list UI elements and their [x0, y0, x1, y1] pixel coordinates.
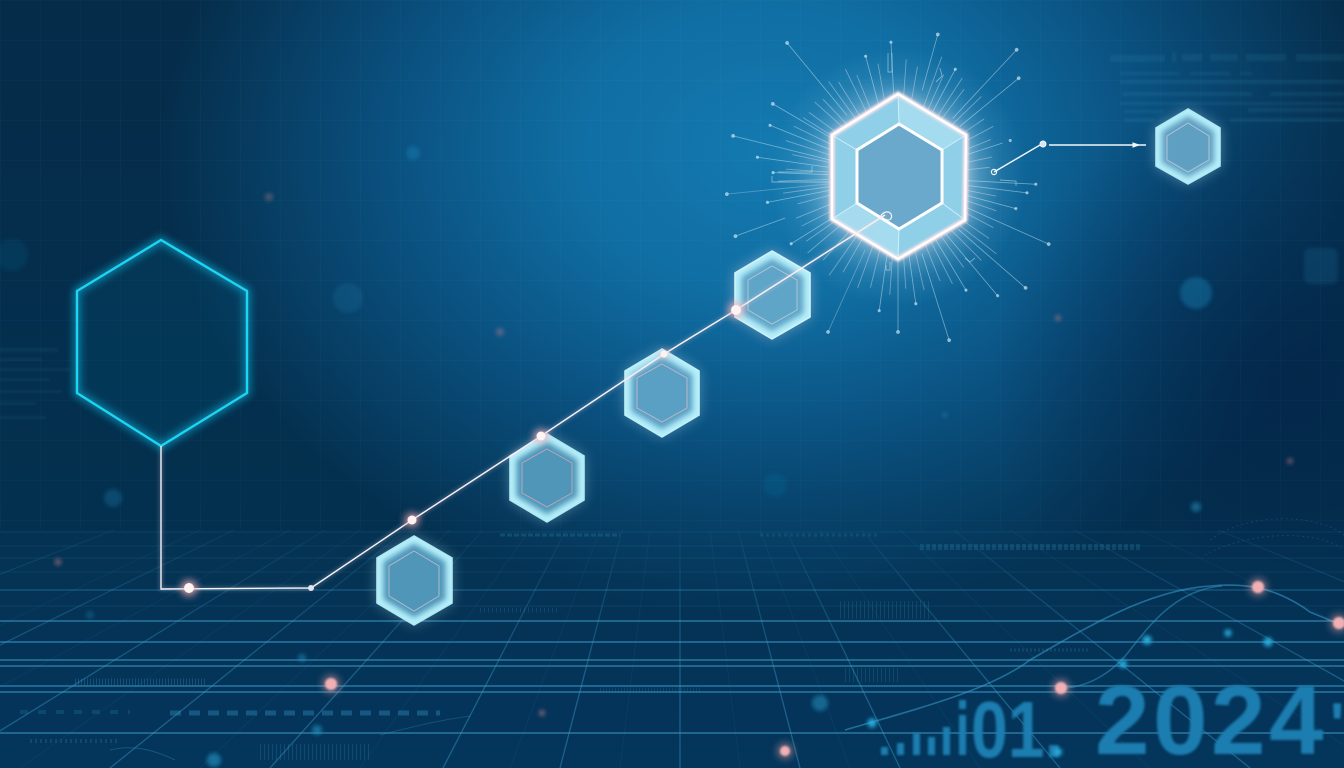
- year text: 01. 2024: [881, 665, 1344, 768]
- trend curves bottom right: [845, 585, 1344, 730]
- bar glyph row: [881, 700, 966, 755]
- label: apostrophe: ': [1330, 691, 1344, 758]
- bracket details on rays: [772, 53, 1016, 270]
- outer hexagon frame: [832, 94, 966, 259]
- hexagon step 2: [510, 434, 584, 522]
- output hexagon: [1156, 109, 1220, 184]
- hexagon step 3: [625, 349, 699, 437]
- hexagon step 1: [377, 536, 452, 625]
- short rays: [778, 57, 997, 295]
- connector over the hexagons: [412, 212, 892, 520]
- central highlighted hexagon: [832, 94, 966, 259]
- faint data text block top right: [1110, 52, 1344, 122]
- prism faces: [832, 94, 966, 259]
- large outlined cyan hexagon: [77, 240, 247, 446]
- radial burst around the central hexagon: [725, 33, 1051, 342]
- path nodes: [181, 302, 744, 596]
- connector base from large hexagon to first node: [161, 446, 412, 589]
- outer bright outline: [832, 94, 966, 259]
- faint micro data rows on the floor: [20, 519, 1344, 760]
- prism edges: [832, 94, 966, 259]
- hexagon step 4: [735, 251, 810, 339]
- perspective floor grid: [0, 530, 1344, 768]
- long rays with end points: [725, 33, 1051, 342]
- arrow from central hexagon to output hexagon: [991, 141, 1146, 175]
- faint data text block left: [0, 348, 70, 419]
- glowing chart nodes bottom right: [322, 578, 1344, 759]
- inner hexagon: [857, 124, 942, 229]
